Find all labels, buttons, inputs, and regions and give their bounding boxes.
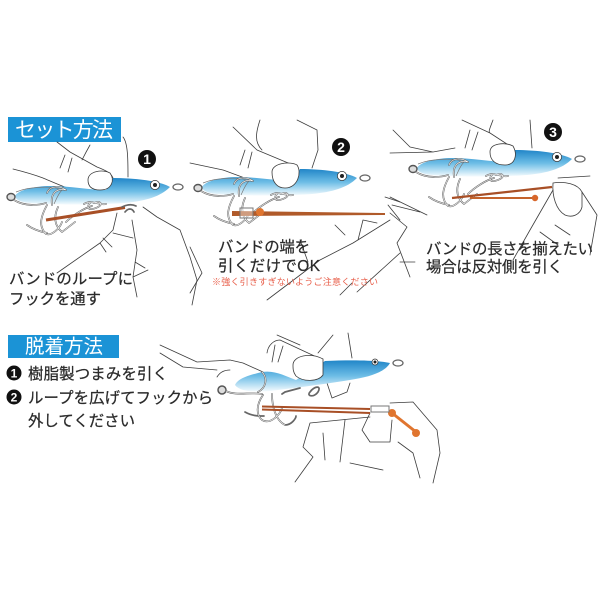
badge 3: 3 xyxy=(549,124,557,140)
panel: step 1 xyxy=(7,137,197,308)
text: step 1 caption xyxy=(9,270,133,308)
bands xyxy=(452,187,552,201)
text: removal steps xyxy=(6,365,213,430)
text: step 1 caption: フックを通す xyxy=(9,290,101,308)
heading: 脱着方法 xyxy=(8,335,119,358)
text: step 1 caption: バンドのループに xyxy=(9,270,133,288)
heading: 脱着方法: 脱着方法 xyxy=(25,336,103,358)
text: removal steps: 樹脂製つまみを引く xyxy=(28,365,168,383)
text: step 2 caption: 引くだけでOK xyxy=(218,257,321,275)
illustration: removing the band xyxy=(160,333,440,483)
badge 2: 2 xyxy=(337,139,345,155)
text: step 3 caption xyxy=(426,240,593,276)
bands and pull tab xyxy=(262,406,420,437)
band xyxy=(232,208,385,218)
step 2 number xyxy=(6,390,22,404)
text: step 3 caption: バンドの長さを揃えたい xyxy=(426,240,593,258)
illustration: hands holding lure with band through hook xyxy=(7,137,197,305)
text: removal steps: 外してください xyxy=(28,412,135,430)
text: step 2 caption xyxy=(218,238,321,275)
text: step 3 caption: 場合は反対側を引く xyxy=(426,258,563,276)
text: caution note: ※強く引きすぎないようご注意ください xyxy=(212,276,378,287)
badge 1 xyxy=(138,150,156,168)
illustration: pulling band end xyxy=(190,120,400,300)
illustration: evening up the band xyxy=(390,120,597,277)
step 2 number: 2 xyxy=(11,390,18,404)
step 1 number xyxy=(6,366,22,380)
panel: step 3 xyxy=(390,120,597,277)
badge 1: 1 xyxy=(143,151,151,167)
panel: step 2 xyxy=(190,120,400,300)
badge 2 xyxy=(332,138,350,156)
lure xyxy=(218,359,403,425)
heading: セット方法: セット方法 xyxy=(15,119,113,142)
badge 3 xyxy=(544,123,562,141)
step 1 number: 1 xyxy=(11,366,18,380)
text: step 2 caption: バンドの端を xyxy=(218,238,310,256)
text: removal steps: ループを広げてフックから xyxy=(28,389,213,407)
band xyxy=(46,208,125,220)
